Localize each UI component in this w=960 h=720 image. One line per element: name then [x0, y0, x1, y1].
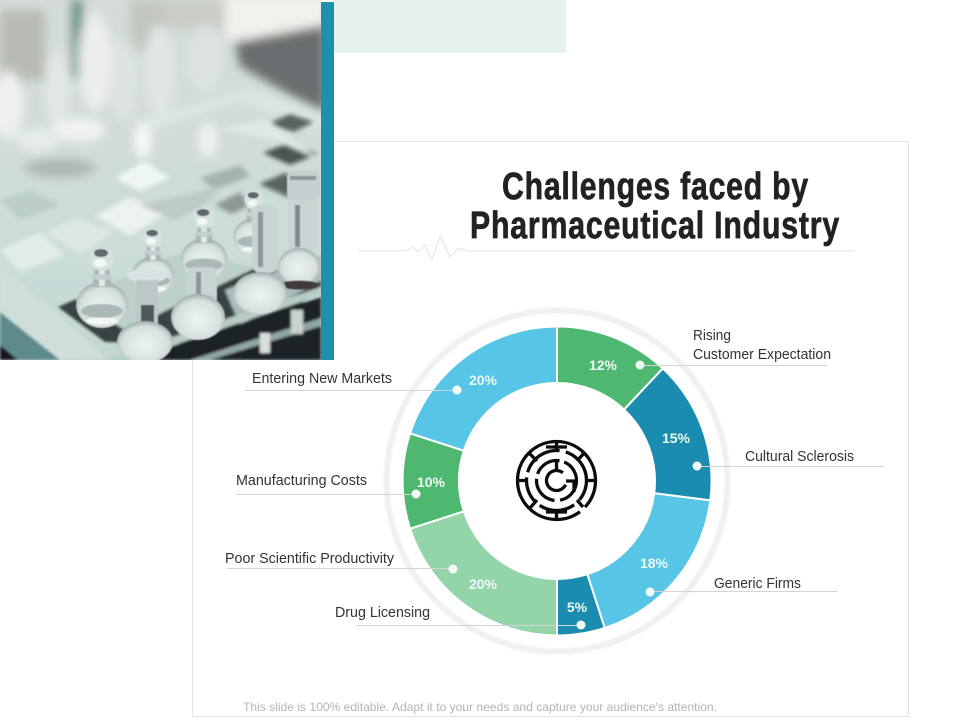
callout: Entering New Markets: 20%	[469, 372, 498, 388]
segment: Rising Customer Expectation 12%	[557, 326, 663, 410]
photo: dark board edge	[0, 250, 321, 360]
callout: Rising Customer Expectation: Customer Expectation	[693, 347, 831, 363]
heartbeat divider	[358, 236, 855, 260]
callout: Poor Scientific Productivity	[225, 551, 498, 592]
callout: Manufacturing Costs	[236, 473, 446, 498]
callout: Manufacturing Costs: Manufacturing Costs	[236, 473, 367, 489]
segment: Entering New Markets 20%	[410, 326, 557, 451]
callout: Generic Firms	[640, 555, 838, 596]
content panel	[192, 142, 908, 716]
icon: maze	[518, 442, 596, 520]
light green header block	[334, 0, 566, 53]
callout: Cultural Sclerosis: 15%	[662, 430, 691, 446]
callout: Generic Firms: Generic Firms	[714, 576, 801, 592]
title	[470, 166, 840, 247]
teal accent bar	[321, 2, 334, 360]
callout: Drug Licensing: 5%	[567, 599, 588, 615]
callout: Poor Scientific Productivity: 20%	[469, 576, 498, 592]
callout: Rising Customer Expectation: Rising	[693, 328, 731, 344]
outer ring	[386, 310, 728, 652]
callout: Drug Licensing	[335, 599, 588, 630]
callout: Manufacturing Costs: 10%	[417, 474, 446, 490]
callout: Generic Firms: 18%	[640, 555, 669, 571]
callout: Cultural Sclerosis: Cultural Sclerosis	[745, 449, 854, 465]
footer note: This slide is 100% editable. Adapt it to your needs and capture your audience's attention.	[243, 700, 717, 714]
segment: Generic Firms 18%	[587, 493, 710, 628]
photo: chess pieces	[76, 170, 320, 363]
title: Challenges faced by	[502, 166, 809, 208]
callout: Cultural Sclerosis	[662, 430, 884, 470]
callout: Entering New Markets	[245, 371, 498, 394]
segment: Drug Licensing 5%	[557, 574, 605, 636]
segment: Poor Scientific Productivity 20%	[410, 511, 557, 636]
chess photo	[0, 0, 325, 363]
callout: Drug Licensing: Drug Licensing	[335, 605, 430, 621]
title: Pharmaceutical Industry	[470, 205, 840, 247]
donut chart	[386, 310, 728, 652]
callout: Rising Customer Expectation: 12%	[589, 357, 618, 373]
segment: Cultural Sclerosis 15%	[624, 368, 712, 500]
callout: Rising Customer Expectation	[589, 328, 831, 373]
callout: Poor Scientific Productivity: Poor Scientific Productivity	[225, 551, 395, 567]
segment: Manufacturing Costs 10%	[403, 433, 464, 529]
callout: Entering New Markets: Entering New Markets	[252, 371, 392, 387]
